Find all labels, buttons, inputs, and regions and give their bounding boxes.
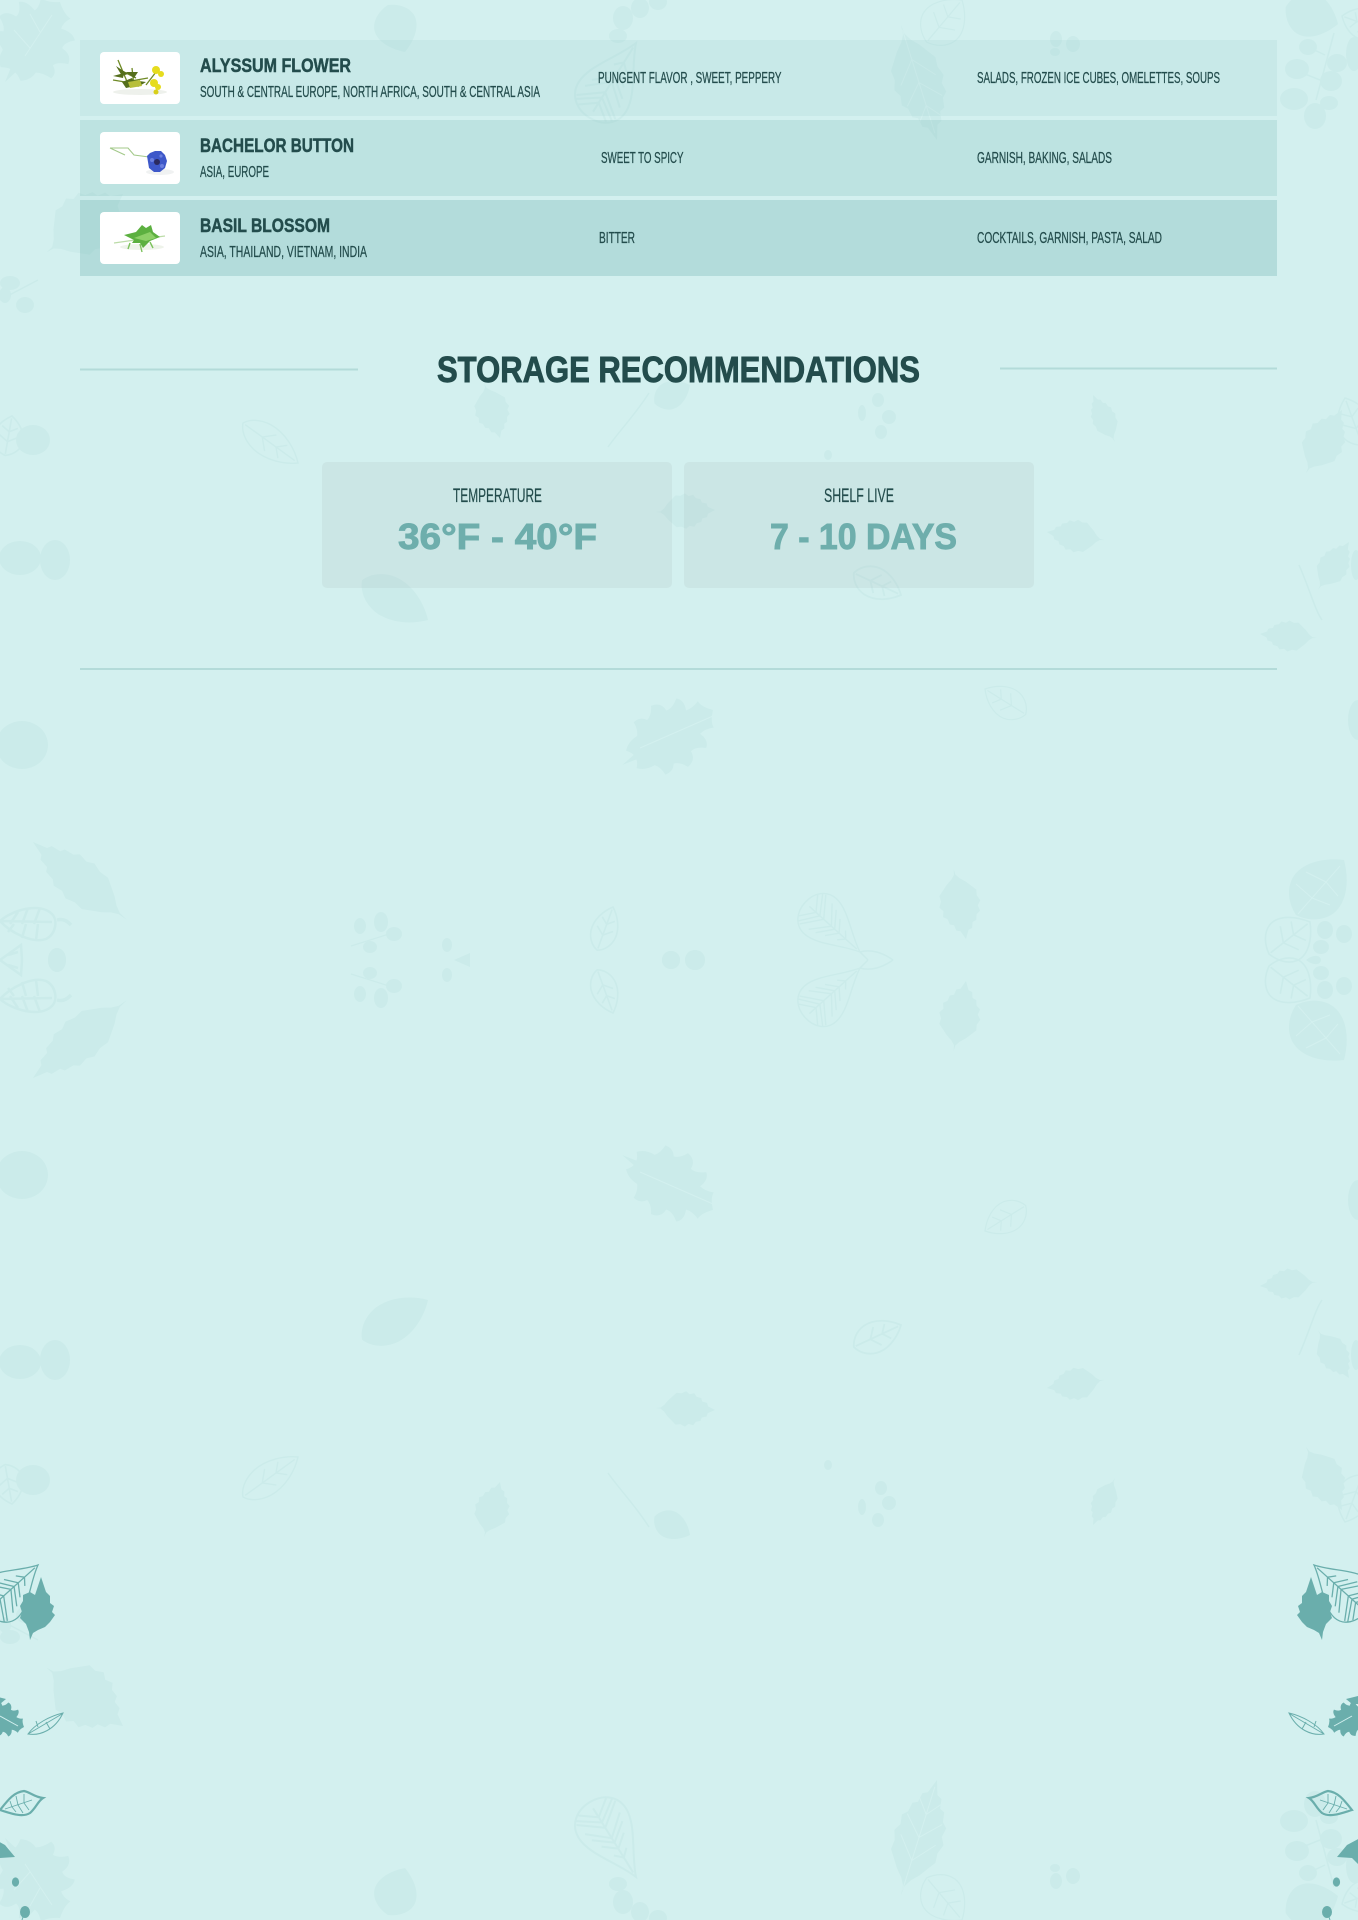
icon: bachelor button photo xyxy=(100,132,180,184)
text: basil blossom name and origin xyxy=(200,215,367,261)
icon: basil blossom photo xyxy=(100,212,180,264)
panel: flower table xyxy=(80,40,1277,276)
faint leaf pattern, bottom half mirrored xyxy=(0,948,1358,1920)
text: basil blossom name and origin: ASIA, THAILAND, VIETNAM, INDIA xyxy=(200,244,367,261)
icon: alyssum flower photo xyxy=(100,52,180,104)
text: alyssum name and origin: SOUTH & CENTRAL EUROPE, NORTH AFRICA, SOUTH & CENTRAL ASIA xyxy=(200,84,540,101)
row: alyssum flower xyxy=(80,40,1277,116)
text: bachelor button name and origin: BACHELOR BUTTON xyxy=(200,135,354,157)
text: bachelor button uses: GARNISH, BAKING, SALADS xyxy=(977,150,1112,167)
row: basil blossom xyxy=(80,200,1277,276)
text: alyssum name and origin: ALYSSUM FLOWER xyxy=(200,55,351,77)
text: basil blossom uses: COCKTAILS, GARNISH, PASTA, SALAD xyxy=(977,230,1162,247)
panel: temperature xyxy=(322,462,672,588)
dark teal leaves, bottom left corner xyxy=(0,1546,63,1920)
panel: shelf life xyxy=(684,462,1034,588)
panel: shelf life: 7 - 10 DAYS xyxy=(770,516,957,557)
row: bachelor button xyxy=(80,120,1277,196)
panel: shelf life: SHELF LIVE xyxy=(824,485,894,507)
text: bachelor button name and origin xyxy=(200,135,354,181)
text: bachelor button name and origin: ASIA, EUROPE xyxy=(200,164,269,181)
panel: temperature: 36°F - 40°F xyxy=(398,516,597,557)
text: alyssum name and origin xyxy=(200,55,540,101)
heading: storage recommendations with side rules: STORAGE RECOMMENDATIONS xyxy=(437,349,920,390)
text: alyssum flavor: PUNGENT FLAVOR , SWEET, PEPPERY xyxy=(598,70,782,87)
text: basil blossom name and origin: BASIL BLOSSOM xyxy=(200,215,330,237)
text: bachelor button flavor: SWEET TO SPICY xyxy=(601,150,684,167)
faint leaf pattern, top half xyxy=(0,0,1358,972)
panel: temperature: TEMPERATURE xyxy=(453,485,542,507)
dark teal leaves, bottom right corner xyxy=(1289,1546,1358,1920)
text: alyssum uses: SALADS, FROZEN ICE CUBES, OMELETTES, SOUPS xyxy=(977,70,1220,87)
text: basil blossom flavor: BITTER xyxy=(599,230,635,247)
